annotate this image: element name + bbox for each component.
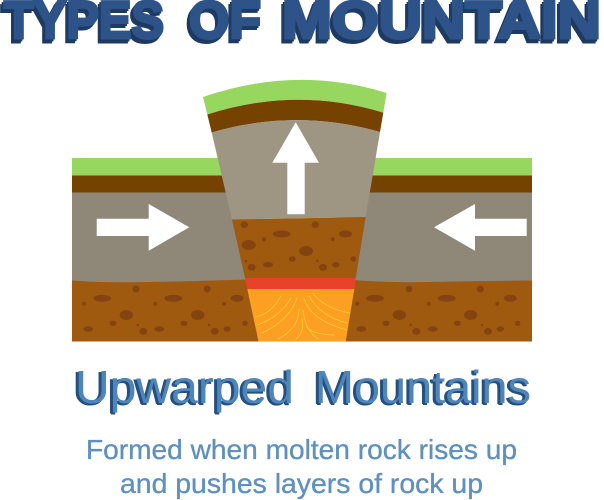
- arrow: pushing right: [97, 204, 189, 251]
- description text: and pushes layers of rock up: [120, 468, 483, 499]
- molten rock: [247, 289, 354, 342]
- heading: Upwarped Mountains: Upwarped: [75, 361, 294, 413]
- heading: Upwarped Mountains: Mountains: [312, 362, 528, 414]
- panel: central uplifted block: [203, 80, 386, 341]
- heading: Upwarped Mountains: Mountains: [315, 361, 531, 413]
- heading: Upwarped Mountains: Upwarped: [73, 363, 292, 415]
- arrow: up: [272, 122, 319, 214]
- description text: Formed when molten rock rises up: [86, 434, 517, 465]
- soil layer: [207, 100, 383, 132]
- red hot layer: [245, 278, 356, 289]
- panel: left rock block: [72, 158, 262, 342]
- diagram: upwarped mountain cross-section: [72, 80, 532, 341]
- brown rock layer: [232, 217, 366, 278]
- heading: Upwarped Mountains: [72, 361, 531, 415]
- molten flow lines: [256, 294, 350, 339]
- title: [1, 0, 601, 54]
- arrow: pushing left: [434, 204, 527, 251]
- description text: [86, 434, 517, 499]
- panel: right rock block: [342, 158, 532, 342]
- grass layer: [203, 80, 386, 114]
- heading: Upwarped Mountains: Upwarped: [72, 362, 291, 414]
- grey rock layer: [212, 120, 380, 220]
- heading: Upwarped Mountains: Mountains: [313, 363, 529, 415]
